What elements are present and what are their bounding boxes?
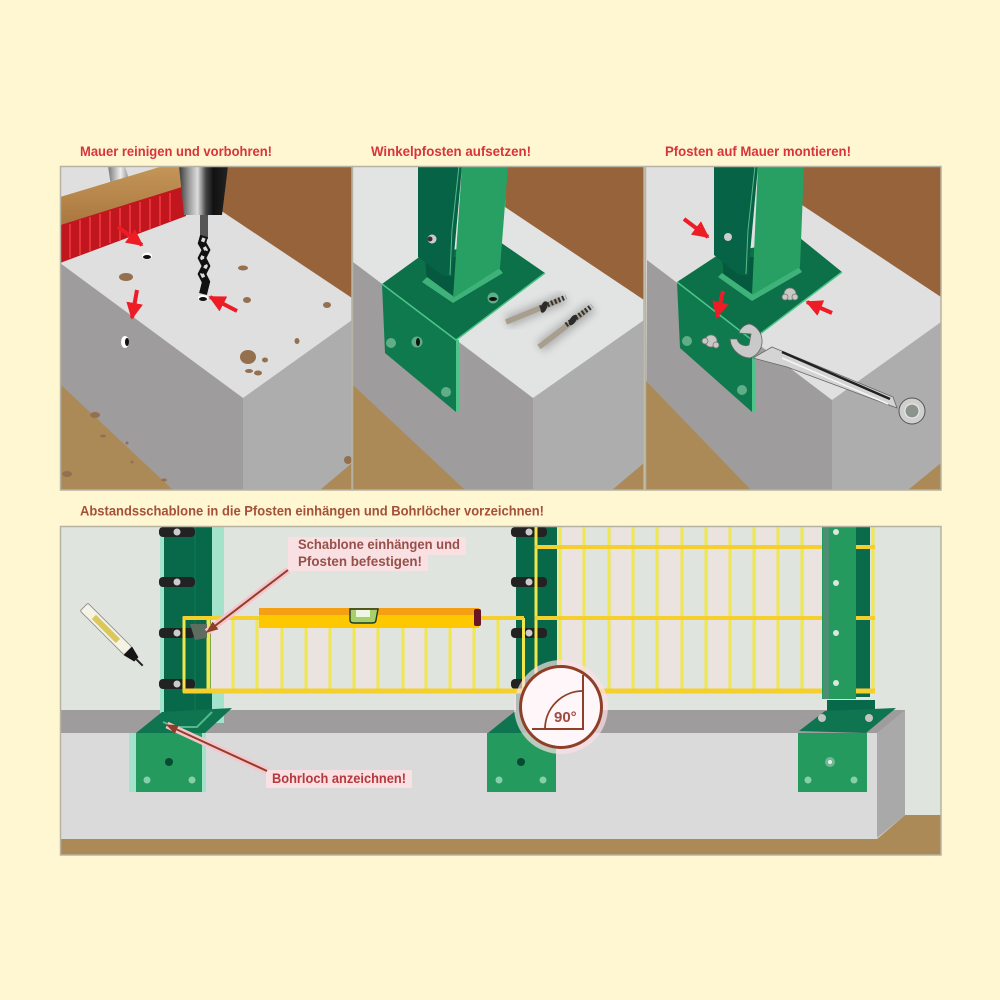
ground: [60, 815, 942, 855]
callout: mark drill hole: Bohrloch anzeichnen!: [272, 771, 406, 786]
heading: step 3: Pfosten auf Mauer montieren!: [665, 143, 851, 159]
panel: step 3 mount post: [646, 166, 941, 490]
distance template: [183, 618, 525, 691]
spirit level: [259, 608, 481, 628]
left post with base: [129, 527, 232, 792]
icon: wrench: [730, 324, 925, 424]
post: [714, 166, 804, 301]
icon: drill dust: [62, 266, 352, 482]
right post with base: [798, 527, 896, 792]
post: [418, 166, 508, 303]
icon: broom: [60, 166, 186, 263]
icon: drill holes: [121, 252, 208, 348]
icon: nuts: [702, 288, 798, 348]
heading: bottom panel: Abstandsschablone in die Pfosten einhängen und Bohrlöcher vorzeichnen!: [80, 502, 544, 518]
angle bracket: [677, 238, 842, 412]
arrows: red markers: [684, 219, 832, 317]
icon: marker pen: [80, 603, 144, 666]
fence panel panes: [563, 527, 822, 691]
icon: drill: [179, 166, 228, 294]
icon: 90 degree angle: 90°: [554, 709, 577, 726]
panel border: bottom: [60, 526, 941, 855]
callout: mark drill hole: [167, 725, 412, 788]
icon: anchor bolts: [506, 297, 592, 347]
fence panel: [535, 527, 875, 691]
heading: step 2: Winkelpfosten aufsetzen!: [371, 143, 531, 159]
heading: step 1: Mauer reinigen und vorbohren!: [80, 143, 272, 159]
callout: hook template: [207, 537, 466, 632]
template panes: [211, 620, 473, 690]
callout: hook template: Pfosten befestigen!: [298, 554, 422, 569]
panel borders: [60, 166, 941, 490]
arrows: red markers: [118, 227, 237, 318]
panel: step 1 clean wall and drill: [60, 166, 352, 490]
callout: hook template: Schablone einhängen und: [298, 537, 460, 552]
panel: step 2 place angle post: [353, 166, 644, 490]
right post back: [827, 527, 875, 724]
panel: template and fence on wall: [60, 527, 942, 855]
wall: [60, 710, 905, 839]
middle post with base: [487, 527, 557, 792]
angle bracket: [382, 242, 545, 412]
icon: 90 degree angle: [514, 660, 608, 754]
